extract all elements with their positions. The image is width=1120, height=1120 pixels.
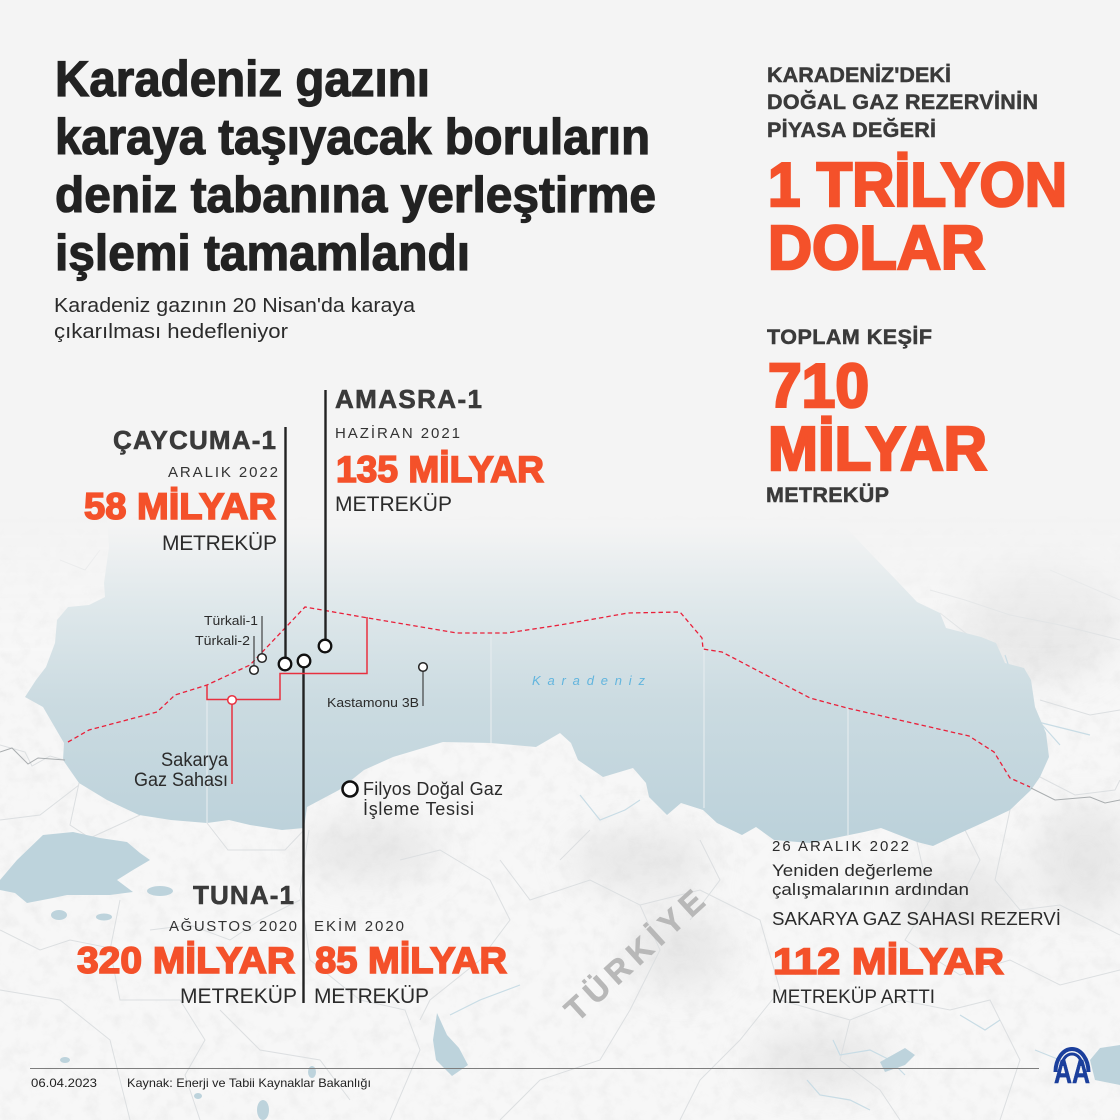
Filyos processing facility: İşleme Tesisi [363,799,474,819]
market value heading [767,63,1038,142]
title: deniz tabanına yerleştirme [55,167,656,223]
Tuna-1 October unit: METREKÜP [314,985,429,1008]
Amasra-1 name: AMASRA-1 [335,384,482,414]
Çaycuma-1 date: ARALIK 2022 [168,464,278,481]
market value heading: DOĞAL GAZ REZERVİNİN [767,89,1038,114]
panel: total discovery [766,325,987,507]
Türkiye country label: TÜRKİYE [557,883,711,1028]
market value heading: KARADENİZ'DEKİ [767,63,951,87]
footer source: Kaynak: Enerji ve Tabii Kaynaklar Bakanlığı [127,1076,371,1090]
footer date: 06.04.2023 [31,1076,97,1090]
well marker: Tuna-1 [298,655,310,667]
Sea of Marmara and lakes [0,832,1120,1120]
update description: Yeniden değerleme [772,861,933,880]
market value heading: PİYASA DEĞERİ [767,117,936,142]
land border east [1031,788,1120,803]
panel: Sakarya reserve update [772,838,1061,1008]
Tuna-1 leader line [302,661,305,1003]
Çaycuma-1 unit: METREKÜP [162,532,277,555]
Tuna-1 August date: AĞUSTOS 2020 [169,918,297,935]
market value figure: 1 TRİLYON [768,151,1067,220]
Sakarya gas field marker and label [134,696,236,791]
Amasra-1 leader line [324,390,327,646]
title: karaya taşıyacak boruların [55,109,650,165]
maritime border, dashed [68,607,1030,787]
Black Sea [25,520,1049,846]
icon: AA logo [1054,1049,1090,1090]
Çaycuma-1 name: ÇAYCUMA-1 [113,425,276,455]
market value figure: DOLAR [768,214,985,283]
update description: çalışmalarının ardından [772,880,969,899]
total discovery heading: TOPLAM KEŞİF [767,325,932,349]
Amasra-1 date: HAZİRAN 2021 [335,424,460,442]
Tuna-1 October volume: 85 MİLYAR [315,940,507,981]
reserve unit: METREKÜP ARTTI [772,987,935,1008]
thin sea block lines [207,635,848,835]
total discovery figure: MİLYAR [768,415,987,484]
footer rule [30,1068,1039,1070]
well marker: Çaycuma-1 [279,658,291,670]
Amasra-1 volume: 135 MİLYAR [336,449,544,490]
well marker: Kastamonu 3B: Kastamonu 3B [327,695,419,710]
subtitle: Karadeniz gazının 20 Nisan'da karaya [54,295,416,317]
well marker: Kastamonu 3B [327,663,427,710]
Tuna-1 October date: EKİM 2020 [314,917,404,935]
Tuna-1 August unit: METREKÜP [180,985,297,1008]
Filyos processing facility: Filyos Doğal Gaz [363,779,503,799]
well marker: Türkali-1: Türkali-1 [204,613,258,628]
map: land, sea and borders [0,500,1120,1120]
title [55,51,656,281]
reserve figure: 112 MİLYAR [773,941,1004,982]
subtitle [54,295,416,343]
icon: AA logo: AA [1054,1053,1090,1090]
Tuna-1 name: TUNA-1 [193,880,294,910]
Karadeniz sea label: Karadeniz [532,673,646,688]
title: işlemi tamamlandı [55,225,470,281]
update date: 26 ARALIK 2022 [772,838,909,855]
update description [772,861,969,899]
panel: Amasra-1 [326,384,544,646]
land base [0,500,1120,1120]
Tuna-1 August volume: 320 MİLYAR [77,940,295,981]
well marker: Amasra-1 [319,640,331,652]
total discovery figure [768,352,987,484]
Çaycuma-1 leader line [284,427,287,664]
Çaycuma-1 volume: 58 MİLYAR [84,486,276,527]
total discovery unit: METREKÜP [766,482,889,507]
panel: market value [767,63,1067,283]
well marker: Türkali-1 [204,613,266,662]
market value figure [768,151,1067,283]
Sakarya gas field boundary [207,617,367,700]
land border west [0,748,65,764]
title: Karadeniz gazını [55,51,430,107]
Sakarya gas field marker and label: Gaz Sahası [134,770,228,791]
panel: Tuna-1 [77,661,507,1008]
well marker: Türkali-2: Türkali-2 [195,633,250,648]
panel: Çaycuma-1 [84,425,286,664]
Amasra-1 unit: METREKÜP [335,493,452,516]
well marker: Türkali-2 [195,633,258,674]
total discovery figure: 710 [768,352,869,421]
Filyos processing facility [342,779,503,819]
Sakarya gas field marker and label: Sakarya [161,750,228,771]
subtitle: çıkarılması hedefleniyor [54,321,288,343]
reserve heading: SAKARYA GAZ SAHASI REZERVİ [772,909,1061,929]
